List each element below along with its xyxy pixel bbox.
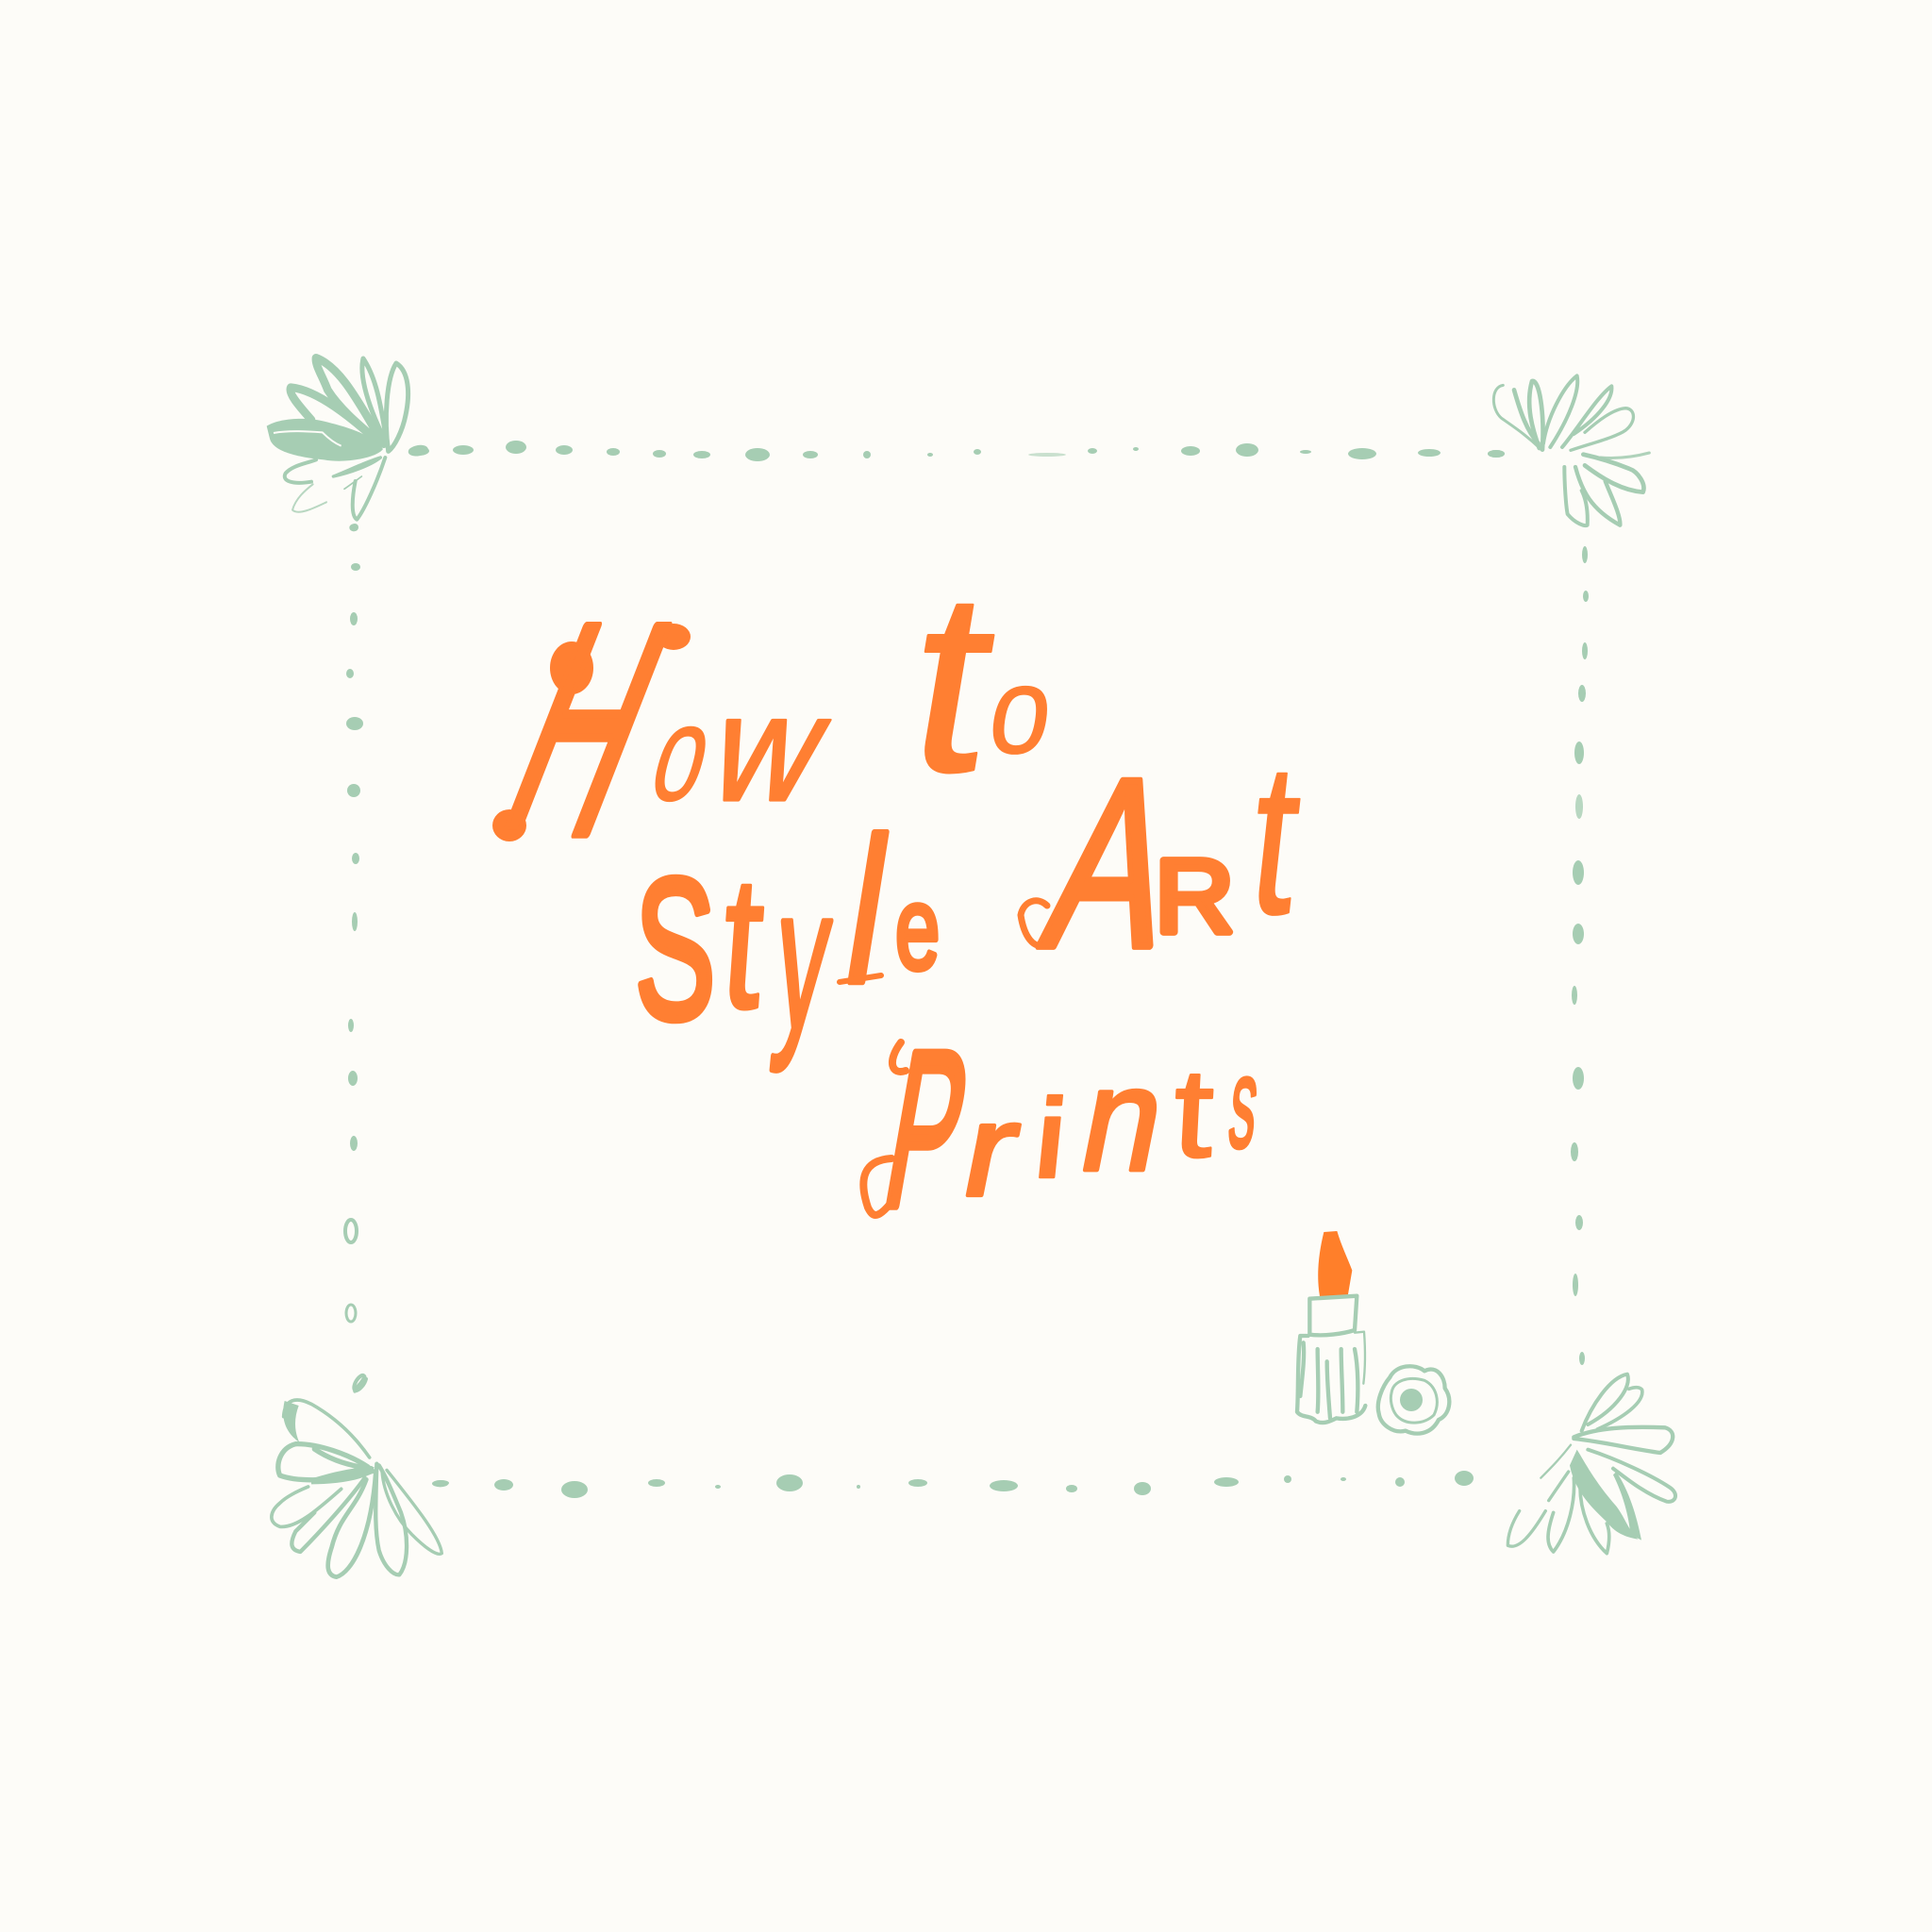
- icon: lipstick: [1297, 1231, 1365, 1423]
- title word: Prints: P: [871, 1007, 983, 1254]
- title word: Prints: i: [1027, 1075, 1074, 1202]
- title word: Style: y: [767, 846, 840, 1073]
- title word: to: o: [981, 642, 1062, 780]
- title word: Style: e: [895, 862, 940, 994]
- title word: Style: [635, 795, 940, 1073]
- icon: top-left flower: [267, 358, 429, 531]
- title word: Art: t: [1241, 718, 1311, 959]
- title word: How: [466, 560, 848, 898]
- lipstick bullet: [1318, 1231, 1352, 1296]
- top dotted border: [408, 441, 1505, 461]
- right dotted border: [1571, 546, 1589, 1365]
- title word: Prints: t: [1170, 1042, 1217, 1184]
- title word: Style: S: [635, 838, 715, 1061]
- title: How to Style Art Prints: [466, 538, 1311, 1254]
- title word: Prints: n: [1069, 1038, 1178, 1202]
- lipstick collar: [1309, 1296, 1357, 1335]
- title word: Art: [1021, 718, 1311, 998]
- title word: Style: l: [833, 795, 903, 1025]
- title word: Art: A: [1026, 728, 1199, 998]
- bottom dotted border: [434, 1471, 1474, 1498]
- icon: top-right flower: [1488, 375, 1649, 525]
- title word: to: t: [892, 538, 1015, 825]
- title word: How: H: [466, 560, 708, 898]
- title word: Prints: [863, 1007, 1265, 1254]
- icon: bottom-right flower: [1507, 1374, 1675, 1554]
- left dotted border: [345, 524, 367, 1392]
- title word: How: o: [637, 677, 729, 829]
- title word: How: w: [693, 663, 848, 832]
- title word: Prints: r: [952, 1076, 1031, 1224]
- dotted frame: [345, 441, 1589, 1498]
- title word: Art: R: [1155, 839, 1234, 955]
- icon: bottom-left flower: [272, 1379, 448, 1577]
- lipstick case: [1297, 1332, 1365, 1423]
- title word: Prints: s: [1224, 1031, 1265, 1175]
- icon: rosette flower: [1378, 1366, 1449, 1434]
- title word: Style: t: [716, 837, 770, 1048]
